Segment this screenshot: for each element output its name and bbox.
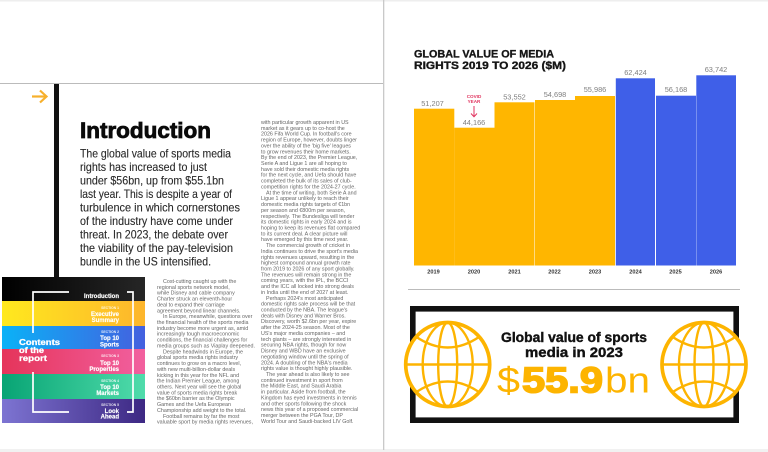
text block: body column 2: market as it gears up to co-host the xyxy=(261,126,345,132)
text block: body column 2: coming years, with the IPL, the BCCI xyxy=(261,278,348,284)
year axis labels: 2024 xyxy=(629,270,643,276)
text block: introduction summary: last year. This is despite a year of xyxy=(80,187,233,201)
text block: body column 2: in particular. Aside from football, the xyxy=(261,390,346,396)
text block: body column 1: industry become more urgent as, amid xyxy=(157,326,248,332)
text block: body column 1: deal to expand their carriage xyxy=(157,302,225,308)
text block: body column 2: to grow revenues their home markets. xyxy=(261,149,351,155)
text block: body column 1: continues to grow on a macro level, xyxy=(157,361,241,367)
callout: covid year: YEAR xyxy=(468,99,481,104)
text block: introduction summary: turbulence in which cornerstones xyxy=(80,200,240,214)
value labels: 44,166 xyxy=(463,118,485,127)
contents: section 5 xyxy=(101,403,120,420)
contents: section 5: SECTION 5 xyxy=(101,403,119,407)
value labels: 53,552 xyxy=(503,93,526,102)
text block: body column 2: respectively. The Bundesliga will tender xyxy=(261,214,355,220)
text block: body column 1: Football remains by far the most xyxy=(163,414,240,420)
text block: body column 2: Perhaps 2024's most anticipated xyxy=(266,296,343,302)
value labels: 56,168 xyxy=(665,85,687,94)
text block: introduction summary: of the industry have come under xyxy=(80,214,233,228)
callout heading xyxy=(501,330,647,360)
text block: introduction summary: under $56bn, up from $55.1bn xyxy=(80,173,224,187)
text block: body column 1: with new multi-billion-dollar deals xyxy=(156,367,235,373)
text block: body column 2: from 2019 to 2026 of any sport globally. xyxy=(261,266,354,272)
black vertical rule xyxy=(54,84,59,277)
text block: body column 2: At the time of writing, both Serie A and xyxy=(266,190,357,196)
text block: body column 1: In Europe, meanwhile, questions over xyxy=(163,314,253,320)
contents: section 4: SECTION 4 xyxy=(101,379,119,383)
text block: body column 1: increasingly tough macroeconomic xyxy=(157,332,240,338)
year axis labels: 2023 xyxy=(589,270,601,276)
text block: introduction summary: The global value of sports media xyxy=(80,146,231,160)
text block: body column 1: value of sports media rights break xyxy=(157,390,238,396)
text block: body column 2: securing NBA rights, though for now xyxy=(261,343,346,349)
contents: section 5: Ahead xyxy=(101,414,119,420)
text block: body column 2: US's major media companies – and xyxy=(261,331,345,337)
chart title: RIGHTS 2019 TO 2026 ($M) xyxy=(414,60,566,72)
text block: body column 2: per season and €800m per season, xyxy=(261,208,345,214)
text block: body column 2: continued investment in sport from xyxy=(261,378,343,384)
text block: body column 2: to its current deal. A clear picture will xyxy=(261,231,347,237)
text block: body column 2: news this year of a proposed commercial xyxy=(261,407,358,413)
text block: body column 1: the financial health of the sports media xyxy=(157,320,249,326)
text block: body column 2: conducted by the NBA. The league's xyxy=(261,308,348,314)
text block: body column 1: kicking in this year for the NFL and xyxy=(157,373,239,379)
contents: introduction: Introduction xyxy=(84,294,119,300)
text block: body column 2: have sold their domestic media rights xyxy=(261,167,350,173)
contents heading: Contents xyxy=(19,337,60,347)
text block: body column 2: Discovery, worth $2.6bn per year, expire xyxy=(261,319,356,325)
text block: body column 2: Disney and WBD have an exclusive xyxy=(261,349,346,355)
text block: body column 1: others. Next year will see the global xyxy=(157,384,241,390)
text block: body column 2: rights revenues upward, resulting in the xyxy=(261,255,354,261)
text block: body column 1: agreement beyond linear channels. xyxy=(157,308,240,314)
callout heading: media in 2023 xyxy=(525,345,624,360)
text block: introduction summary: threat. In 2023, the debate over xyxy=(80,227,228,241)
contents: section 4: Top 10 xyxy=(100,385,120,391)
text block: body column 2: Ligue 1 appear unlikely to reach their xyxy=(261,196,349,202)
text block: body column 2: rights value is thought highly plausible. xyxy=(261,366,352,372)
callout: covid year: COVID xyxy=(467,94,482,99)
year axis labels: 2025 xyxy=(669,270,682,276)
big number xyxy=(497,360,650,401)
year axis labels: 2020 xyxy=(468,270,480,276)
text block: body column 2: The year ahead is also likely to see xyxy=(266,372,349,378)
text block: body column 1: Despite headwinds in Europe, the xyxy=(163,349,243,355)
contents heading: report xyxy=(19,353,47,363)
text block: introduction summary: bundle in the US intensified. xyxy=(80,254,211,268)
text block: body column 2: 2024. A doubling of the NBA's media xyxy=(261,360,348,366)
contents: section 1: Executive xyxy=(91,312,120,318)
text block: body column 1: conditions, the financial challenges for xyxy=(157,338,248,344)
text block: body column 1: Games and the Uefa European xyxy=(157,402,231,408)
big number: 55.9 xyxy=(522,360,603,401)
text block: introduction summary: rights has increased to just xyxy=(80,160,208,174)
text block: body column 2: its domestic rights in early 2024 and is xyxy=(261,220,352,226)
text block: body column 2: over the ability of the 'big five' leagues xyxy=(261,143,351,149)
value labels: 51,207 xyxy=(421,99,444,108)
text block: body column 2: tech giants – are strongly interested in xyxy=(261,337,351,343)
text block: body column 2: India continues to drive the sport's media xyxy=(261,249,358,255)
icon: right globe xyxy=(662,322,746,406)
value labels: 55,986 xyxy=(584,85,606,94)
text block: body column 1: global sports media rights industry xyxy=(157,355,238,361)
heading: Introduction: Introduction xyxy=(80,118,211,143)
contents: section 3: Properties xyxy=(89,367,120,373)
text block: body column 2: after the 2024-25 season. Most of the xyxy=(261,325,350,331)
value labels: 63,742 xyxy=(705,65,727,74)
contents heading xyxy=(19,337,60,363)
contents: section 1: Summary xyxy=(92,318,120,324)
text block: body column 1: Charter struck an eleventh-hour xyxy=(157,297,232,303)
year axis labels: 2026 xyxy=(710,270,722,276)
text block: body column 2: the Middle East, and Saudi Arabia xyxy=(261,384,342,390)
text block: body column 2: have emerged by this time next year. xyxy=(261,237,348,243)
contents heading: of the xyxy=(19,345,44,355)
panel: contents of the report xyxy=(2,277,145,423)
text block: body column 1: the $60bn barrier as the Olympic xyxy=(157,396,235,402)
text block: body column 2: domestic rights sale process will be that xyxy=(261,302,356,308)
value labels: 62,424 xyxy=(624,68,647,77)
icon: left globe xyxy=(406,322,490,406)
callout heading: Global value of sports xyxy=(501,330,647,345)
text block: body column 2: Serie A and Ligue 1 are all hoping to xyxy=(261,161,347,167)
value labels: 54,698 xyxy=(544,90,566,99)
text block: body column 1: valuable sport by media rights revenues, xyxy=(157,420,253,426)
contents: section 1: SECTION 1 xyxy=(101,306,119,310)
text block: introduction summary: the viability of the pay-television xyxy=(80,241,233,255)
year axis labels xyxy=(427,270,722,276)
text block: body column 1: Championship add weight to the total. xyxy=(157,408,246,414)
text block: body column 2: The commercial growth of cricket in xyxy=(266,243,350,249)
contents: section 4 xyxy=(96,379,120,397)
text block: body column 2: region of Europe, however, doubts linger xyxy=(261,138,357,144)
contents: section 3 xyxy=(89,354,120,373)
contents: section 3: SECTION 3 xyxy=(101,354,119,358)
text block: body column 1: Cost-cutting caught up with the xyxy=(163,279,236,285)
contents: section 4: Markets xyxy=(96,391,120,397)
text block: body column 2: highest compound annual growth rate xyxy=(261,261,350,267)
big number: $ xyxy=(497,360,520,401)
contents: section 2: Sports xyxy=(100,342,120,348)
chart title: GLOBAL VALUE OF MEDIA xyxy=(414,49,554,61)
text block: body column 1: media groups such as Viaplay deepened. xyxy=(157,343,255,349)
value labels xyxy=(421,65,727,127)
text block: body column 2: World Tour and Saudi-backed LIV Golf. xyxy=(261,419,353,425)
year axis labels: 2021 xyxy=(508,270,521,276)
text block: body column 2: domestic media rights targets of €1bn xyxy=(261,202,350,208)
contents: section 2: Top 10 xyxy=(100,336,120,342)
text block: body column 2: completed the bulk of its sales of club- xyxy=(261,179,352,185)
big number: bn xyxy=(605,360,650,401)
text block: body column 2: and other sports following the shock xyxy=(261,401,347,407)
text block: body column 1: while Disney and cable company xyxy=(156,291,235,297)
text block: body column 2: for the next cycle, and Uefa should have xyxy=(261,173,356,179)
contents: section 3: Top 10 xyxy=(100,361,120,367)
contents: section 5: Look xyxy=(105,409,120,415)
year axis labels: 2019 xyxy=(427,270,440,276)
contents: section 2: SECTION 2 xyxy=(101,330,119,334)
text block: body column 1: the Indian Premier League, among xyxy=(157,379,239,385)
icon: orange arrow xyxy=(32,90,46,102)
bar chart xyxy=(414,65,736,276)
text block: body column 1: regional sports network model, xyxy=(157,285,230,291)
text block: body column 2: with particular growth apparent in US xyxy=(260,120,349,126)
text block: body column 2: and the ICC all locked into strong deals xyxy=(261,284,354,290)
chart title xyxy=(414,49,566,72)
year axis labels: 2022 xyxy=(548,270,561,276)
text block: body column 2: negotiating window until the spring of xyxy=(261,354,349,360)
contents: section 2 xyxy=(100,330,120,348)
text block: body column 2: Kingdom has eyed investments in tennis xyxy=(261,395,357,401)
text block: body column 2: merger between the PGA Tour, DP xyxy=(261,413,343,419)
text block: body column 2: competition rights for the 2024-27 cycle. xyxy=(261,184,356,190)
text block: body column 2: The revenues will remain strong in the xyxy=(261,272,351,278)
text block: introduction summary xyxy=(80,146,240,268)
callout: covid year xyxy=(467,94,482,117)
text block: body column 2: in India until the end of 2027 at least. xyxy=(261,290,348,296)
contents: section 1 xyxy=(91,306,120,324)
callout panel: global value of sports media in 2023 xyxy=(406,309,746,420)
text block: body column 2: 2026 Fifa World Cup. In football's core xyxy=(261,132,352,138)
text block: body column 2: deals with Disney and Warner Bros. xyxy=(261,313,346,319)
text block: body column 2: hoping to keep its revenues flat compared xyxy=(261,225,360,231)
text block: body column 2: By the end of 2023, the Premier League, xyxy=(261,155,357,161)
